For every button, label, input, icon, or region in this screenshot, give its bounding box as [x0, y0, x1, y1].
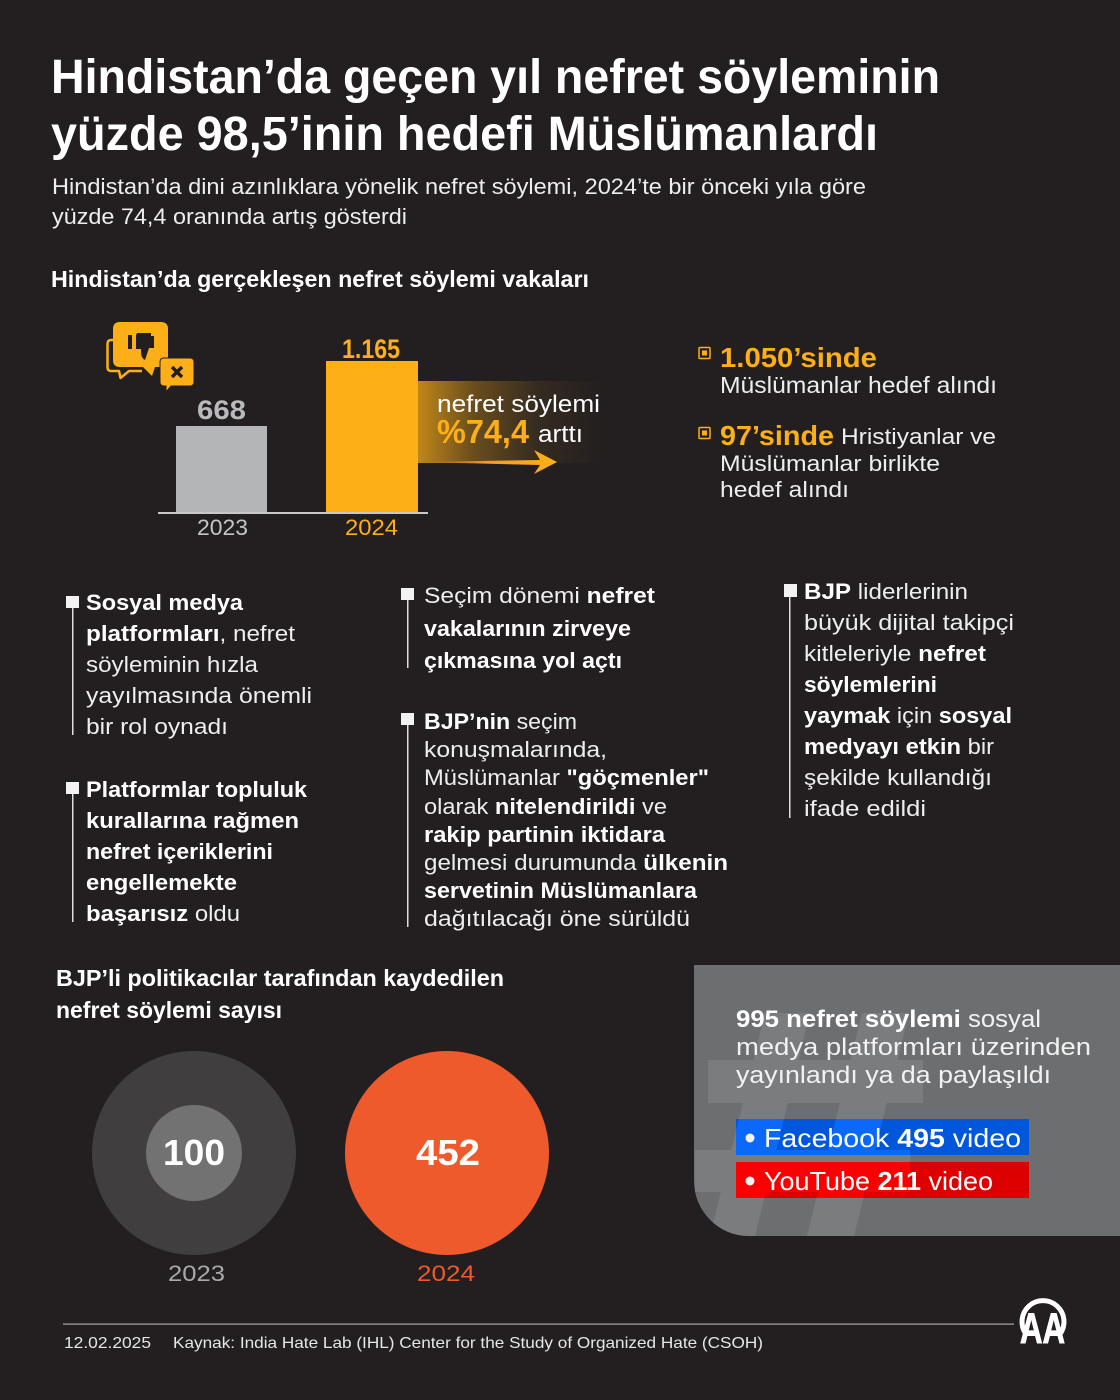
- text block: BJP speeches: dağıtılacağı öne sürüldü: [424, 906, 690, 931]
- growth label: arttı: [538, 421, 583, 448]
- text block: social media platforms: bir rol oynadı: [86, 714, 228, 739]
- title: Hindistan’da geçen yıl nefret söyleminin: [51, 51, 940, 104]
- text block: community rules: nefret içeriklerini: [86, 839, 273, 864]
- text block: election period: [401, 583, 656, 673]
- text block: BJP speeches: servetinin Müslümanlara: [424, 878, 698, 903]
- bullet: [699, 428, 710, 438]
- text block: BJP speeches: [401, 709, 728, 931]
- footer source: Kaynak: India Hate Lab (IHL) Center for the Study of Organized Hate (CSOH): [173, 1335, 763, 1352]
- text block: election period: vakalarının zirveye: [424, 616, 631, 641]
- label 2024: 2024: [345, 515, 398, 540]
- stat 1050: 1.050’sinde: [720, 342, 877, 373]
- text block: community rules: engellemekte: [86, 870, 237, 895]
- facebook bar: [736, 1119, 1029, 1155]
- text block: BJP leaders: söylemlerini: [804, 672, 937, 697]
- text block: election period: Seçim dönemi nefret: [424, 583, 656, 608]
- panel: targeted groups: Müslümanlar hedef alındı: [720, 372, 997, 398]
- text block: community rules: [66, 777, 308, 926]
- text block: BJP speeches: rakip partinin iktidara: [424, 822, 666, 847]
- bar chart: cases 2023 vs 2024: [158, 334, 603, 540]
- value 1.165: 1.165: [342, 334, 400, 364]
- icon: thumbs down speech bubbles: [108, 322, 194, 392]
- chart: circle 2023: [92, 1051, 296, 1286]
- social text: [736, 1006, 1091, 1089]
- text block: BJP leaders: büyük dijital takipçi: [804, 610, 1014, 635]
- text block: social media platforms: Sosyal medya: [86, 590, 244, 615]
- title: yüzde 98,5’inin hedefi Müslümanlardı: [51, 108, 878, 161]
- text block: BJP leaders: ifade edildi: [804, 796, 926, 821]
- stat 97: 97’sinde: [720, 420, 834, 451]
- youtube label: YouTube 211 video: [764, 1166, 993, 1196]
- text block: BJP leaders: medyayı etkin bir: [804, 734, 994, 759]
- arrow: [418, 450, 557, 474]
- text block: social media platforms: söyleminin hızla: [86, 652, 259, 677]
- chart: circle 2024: 2024: [417, 1261, 475, 1286]
- text block: community rules: Platformlar topluluk: [86, 777, 308, 802]
- text block: BJP speeches: olarak nitelendirildi ve: [424, 794, 667, 819]
- panel: targeted groups: Hristiyanlar ve: [841, 424, 996, 449]
- heading: BJP politicians: BJP’li politikacılar tarafından kaydedilen: [56, 965, 504, 991]
- logo: AA: [1020, 1301, 1065, 1353]
- text block: social media platforms: platformları , nefret: [86, 621, 295, 646]
- growth label: %74,4: [437, 413, 530, 450]
- chart: circle 2023: 2023: [168, 1261, 225, 1286]
- growth label: [437, 391, 600, 450]
- value 668: 668: [197, 395, 246, 425]
- chart: circle 2023: 100: [163, 1132, 225, 1173]
- bar 2024: [326, 361, 418, 513]
- heading: hate speech cases: Hindistan’da gerçekleşen nefret söylemi vakaları: [51, 266, 589, 292]
- logo: AA: AA: [1020, 1305, 1065, 1353]
- panel: targeted groups: Müslümanlar birlikte: [720, 451, 940, 476]
- text block: BJP leaders: şekilde kullandığı: [804, 765, 992, 790]
- growth label: nefret söylemi: [437, 391, 600, 418]
- panel: social media: [694, 965, 1120, 1236]
- subtitle: Hindistan’da dini azınlıklara yönelik nefret söylemi, 2024’te bir önceki yıla göre: [52, 174, 866, 199]
- text block: BJP leaders: kitleleriyle nefret: [804, 641, 987, 666]
- text block: community rules: kurallarına rağmen: [86, 808, 299, 833]
- facebook label: Facebook 495 video: [764, 1123, 1021, 1153]
- social text: yayınlandı ya da paylaşıldı: [736, 1062, 1051, 1089]
- icon: hash watermark: [695, 1013, 923, 1236]
- bullet: [699, 348, 710, 358]
- footer date: 12.02.2025: [64, 1335, 151, 1352]
- chart: circle 2024: [345, 1051, 549, 1286]
- text block: election period: çıkmasına yol açtı: [424, 648, 622, 673]
- heading: BJP politicians: nefret söylemi sayısı: [56, 997, 282, 1023]
- text block: social media platforms: [66, 590, 312, 739]
- text block: BJP leaders: yaymak için sosyal: [804, 703, 1012, 728]
- text block: BJP leaders: BJP liderlerinin: [804, 579, 968, 604]
- subtitle: yüzde 74,4 oranında artış gösterdi: [52, 204, 407, 229]
- social text: 995 nefret söylemi sosyal: [736, 1006, 1041, 1033]
- social text: medya platformları üzerinden: [736, 1034, 1091, 1061]
- panel: targeted groups: [699, 342, 997, 502]
- chart: circle 2024: 452: [416, 1132, 480, 1173]
- text block: BJP speeches: konuşmalarında,: [424, 737, 607, 762]
- label 2023: 2023: [197, 515, 248, 540]
- subtitle: [52, 174, 866, 229]
- bar 2023: [176, 426, 267, 513]
- title: [51, 51, 940, 161]
- text block: community rules: başarısız oldu: [86, 901, 240, 926]
- panel: targeted groups: hedef alındı: [720, 477, 849, 502]
- text block: BJP leaders: [784, 579, 1014, 821]
- youtube bar: [736, 1162, 1029, 1198]
- text block: social media platforms: yayılmasında önemli: [86, 683, 312, 708]
- text block: BJP speeches: Müslümanlar "göçmenler": [424, 765, 709, 790]
- heading: BJP politicians: [56, 965, 504, 1023]
- text block: BJP speeches: BJP’nin seçim: [424, 709, 577, 734]
- growth band: [418, 381, 603, 463]
- text block: BJP speeches: gelmesi durumunda ülkenin: [424, 850, 728, 875]
